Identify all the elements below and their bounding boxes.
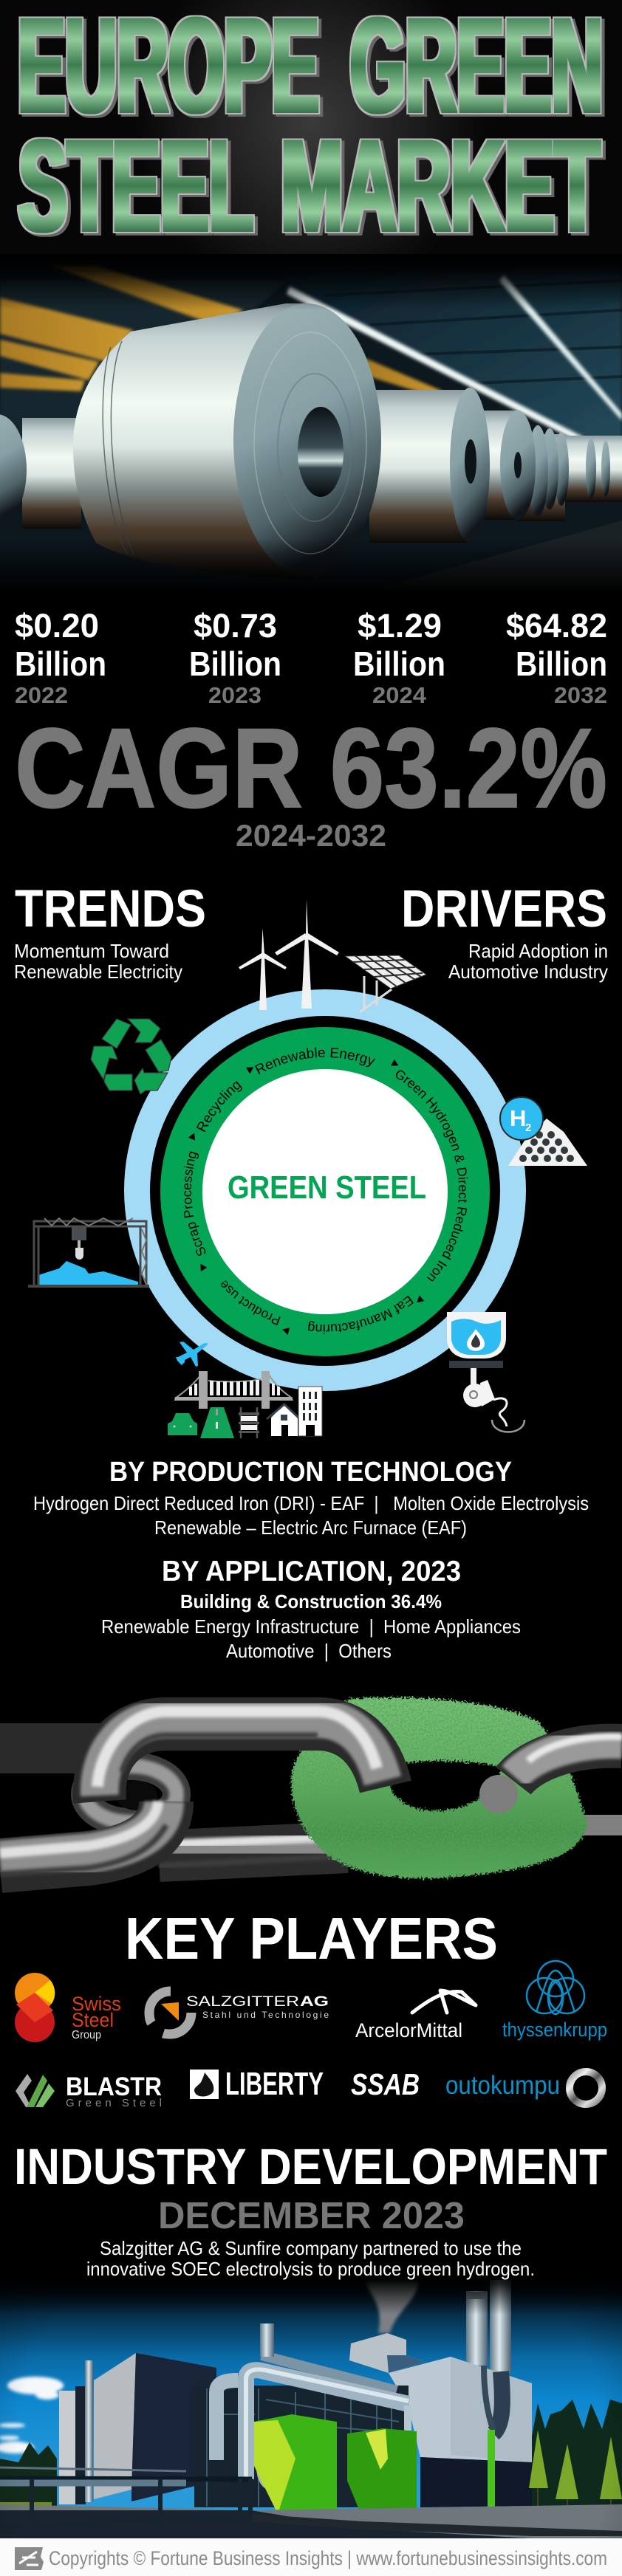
trees right	[528, 2400, 622, 2507]
title panel with glow	[0, 0, 622, 255]
icon: wind turbines	[239, 899, 339, 1010]
logo: ArcelorMittal: ArcelorMittal	[355, 2019, 462, 2041]
title	[18, 0, 603, 259]
application highlight: Building & Construction 36.4%	[180, 1590, 442, 1612]
market value 2023	[189, 607, 281, 708]
far coils	[561, 436, 622, 502]
drivers text: Automotive Industry	[448, 961, 608, 983]
heading: by application: BY APPLICATION, 2023	[162, 1556, 461, 1587]
icon: car	[168, 1413, 197, 1435]
logo: Salzgitter AG	[149, 1991, 329, 2034]
upper pipe run	[262, 2355, 397, 2391]
drivers text	[448, 940, 608, 983]
green ring	[160, 1027, 490, 1356]
market value 2022: Billion	[15, 645, 106, 683]
development text	[86, 2237, 535, 2280]
silver pipes	[216, 2380, 238, 2460]
logo: Liberty: LIBERTY	[225, 2066, 324, 2102]
drivers text: Rapid Adoption in	[468, 940, 608, 962]
icon: bridge	[174, 1371, 293, 1409]
footer	[0, 2538, 622, 2576]
heading: by production technology: BY PRODUCTION TECHNOLOGY	[109, 1457, 512, 1488]
trends text: Momentum Toward	[14, 940, 169, 962]
young trees	[529, 2430, 622, 2499]
logo: Swiss Steel Group: Steel	[72, 2009, 114, 2031]
market value 2022: 2022	[15, 682, 68, 708]
sky vignette	[0, 2280, 622, 2538]
logo: Swiss Steel Group: Swiss	[72, 1993, 121, 2015]
logo: Swiss Steel Group	[15, 1973, 121, 2042]
main grey wall	[94, 2353, 136, 2499]
trends heading: TRENDS	[15, 880, 206, 938]
market value 2024: $1.29	[358, 607, 442, 645]
icon: road	[200, 1407, 234, 1438]
white centre	[202, 1069, 448, 1314]
distant trees left	[0, 2442, 57, 2510]
machinery	[194, 2386, 409, 2507]
icon: recycling	[91, 1019, 171, 1094]
yellow beams	[0, 266, 443, 395]
logo: BLASTR Green Steel	[16, 2072, 162, 2109]
icon: railway	[239, 1407, 259, 1438]
market value 2023: 2023	[208, 682, 262, 708]
icon: house	[267, 1404, 298, 1436]
market value 2024	[353, 607, 445, 708]
heading: key players: KEY PLAYERS	[125, 1906, 498, 1971]
left back bar	[0, 1737, 111, 1759]
barrel	[256, 2445, 283, 2490]
right building	[389, 2357, 532, 2462]
clouds	[0, 2377, 64, 2453]
logo: ArcelorMittal	[355, 1991, 476, 2041]
icon: gantry crane over ore pile	[28, 1218, 149, 1288]
application list	[101, 1615, 521, 1662]
smoke	[366, 2281, 418, 2333]
left background	[0, 281, 288, 443]
development text: Salzgitter AG & Sunfire company partnered to use the	[100, 2237, 522, 2259]
big front link	[98, 1711, 386, 1802]
logo: SSAB: SSAB	[351, 2067, 420, 2101]
right link	[569, 1815, 622, 1835]
development date: DECEMBER 2023	[158, 2194, 465, 2236]
ring labels: Green Hydrogen & Direct Reduced Iron	[396, 1071, 468, 1282]
lower bar behind grass	[159, 1837, 347, 1866]
left coils	[22, 418, 81, 529]
ceiling lights	[287, 275, 622, 443]
icon: hydrogen and iron pile	[500, 1097, 587, 1166]
ring labels: Eaf Manufacturing	[308, 1295, 414, 1334]
stack tube top vent	[260, 2323, 274, 2357]
production technology list	[33, 1492, 589, 1539]
factory ceiling	[281, 266, 622, 443]
grass link	[291, 1697, 587, 1878]
ring labels: Renewable Energy	[255, 1047, 375, 1075]
logo: BLASTR Green Steel: BLASTR	[66, 2072, 162, 2101]
left vertical pipe	[85, 2360, 93, 2502]
ring labels: Recycling	[196, 1081, 242, 1133]
market value 2022: $0.20	[15, 607, 99, 645]
trends text	[14, 940, 182, 983]
market value 2024: Billion	[353, 645, 445, 683]
dark curved duct	[493, 2371, 502, 2434]
ring labels	[183, 1047, 468, 1334]
foreground pipes and railings	[0, 2467, 186, 2471]
ring arrows	[188, 1059, 424, 1335]
logo: Salzgitter AG: AG	[300, 1994, 329, 2010]
market value 2032	[506, 607, 607, 708]
center label: GREEN STEEL	[228, 1169, 426, 1206]
logo: Swiss Steel Group: Group	[72, 2029, 101, 2041]
production technology list: Renewable – Electric Arc Furnace (EAF)	[154, 1517, 467, 1539]
green steel cycle diagram	[124, 989, 526, 1391]
left small wall	[59, 2391, 75, 2504]
ring labels: Scrap Processing	[183, 1151, 205, 1256]
main coil face	[233, 303, 381, 577]
logo: outokumpu: outokumpu	[445, 2071, 560, 2100]
application list: Renewable Energy Infrastructure | Home Appliances	[101, 1615, 521, 1638]
CAGR period: 2024-2032	[236, 818, 386, 853]
factory image	[0, 2270, 622, 2538]
development text: innovative SOEC electrolysis to produce green hydrogen.	[86, 2258, 535, 2280]
ground	[0, 2504, 622, 2538]
footer logo	[15, 2547, 44, 2570]
dark wall	[131, 2353, 216, 2501]
ring labels: Product use	[221, 1280, 281, 1325]
trends text: Renewable Electricity	[14, 961, 182, 983]
floor	[369, 521, 622, 591]
market value 2024: 2024	[372, 682, 427, 708]
icon: hydrogen and iron pile: 2	[525, 1122, 531, 1134]
hero image: steel coils	[0, 254, 622, 592]
icon: electric arc furnace ladle	[447, 1312, 524, 1432]
upper block	[349, 2333, 425, 2373]
market value 2032: 2032	[554, 682, 607, 708]
market value 2023: Billion	[189, 645, 281, 683]
black ring	[150, 1016, 500, 1366]
chain image: steel links with grass link	[0, 1697, 622, 1878]
logo: thyssenkrupp	[502, 1961, 607, 2041]
logo: thyssenkrupp: thyssenkrupp	[502, 2019, 607, 2041]
market value 2032: Billion	[516, 645, 607, 683]
icon: airplane	[176, 1342, 208, 1367]
logo: Salzgitter AG: Stahl und Technologie	[202, 2010, 329, 2020]
main coil hole	[298, 407, 344, 497]
logo: Liberty	[190, 2066, 324, 2102]
ring link	[85, 1766, 177, 1822]
market value 2023: $0.73	[194, 607, 277, 645]
outer light blue ring	[124, 989, 526, 1391]
stacks	[466, 2291, 488, 2366]
logo: BLASTR Green Steel: Green Steel	[66, 2097, 162, 2109]
green boxes	[254, 2414, 337, 2514]
application list: Automotive | Others	[226, 1640, 392, 1662]
right link front	[513, 1737, 622, 1781]
main coil body	[73, 303, 310, 580]
market value 2022	[15, 607, 106, 708]
icon: solar panel	[345, 955, 426, 1012]
lower left front link	[0, 1802, 166, 1874]
logo: Salzgitter AG: SALZGITTER	[186, 1994, 299, 2010]
market value 2032: $64.82	[506, 607, 607, 645]
right link inner end	[479, 1775, 518, 1813]
title: STEEL	[18, 112, 253, 259]
icon: apartment building	[298, 1387, 322, 1436]
icon: hydrogen and iron pile: H	[510, 1105, 526, 1131]
